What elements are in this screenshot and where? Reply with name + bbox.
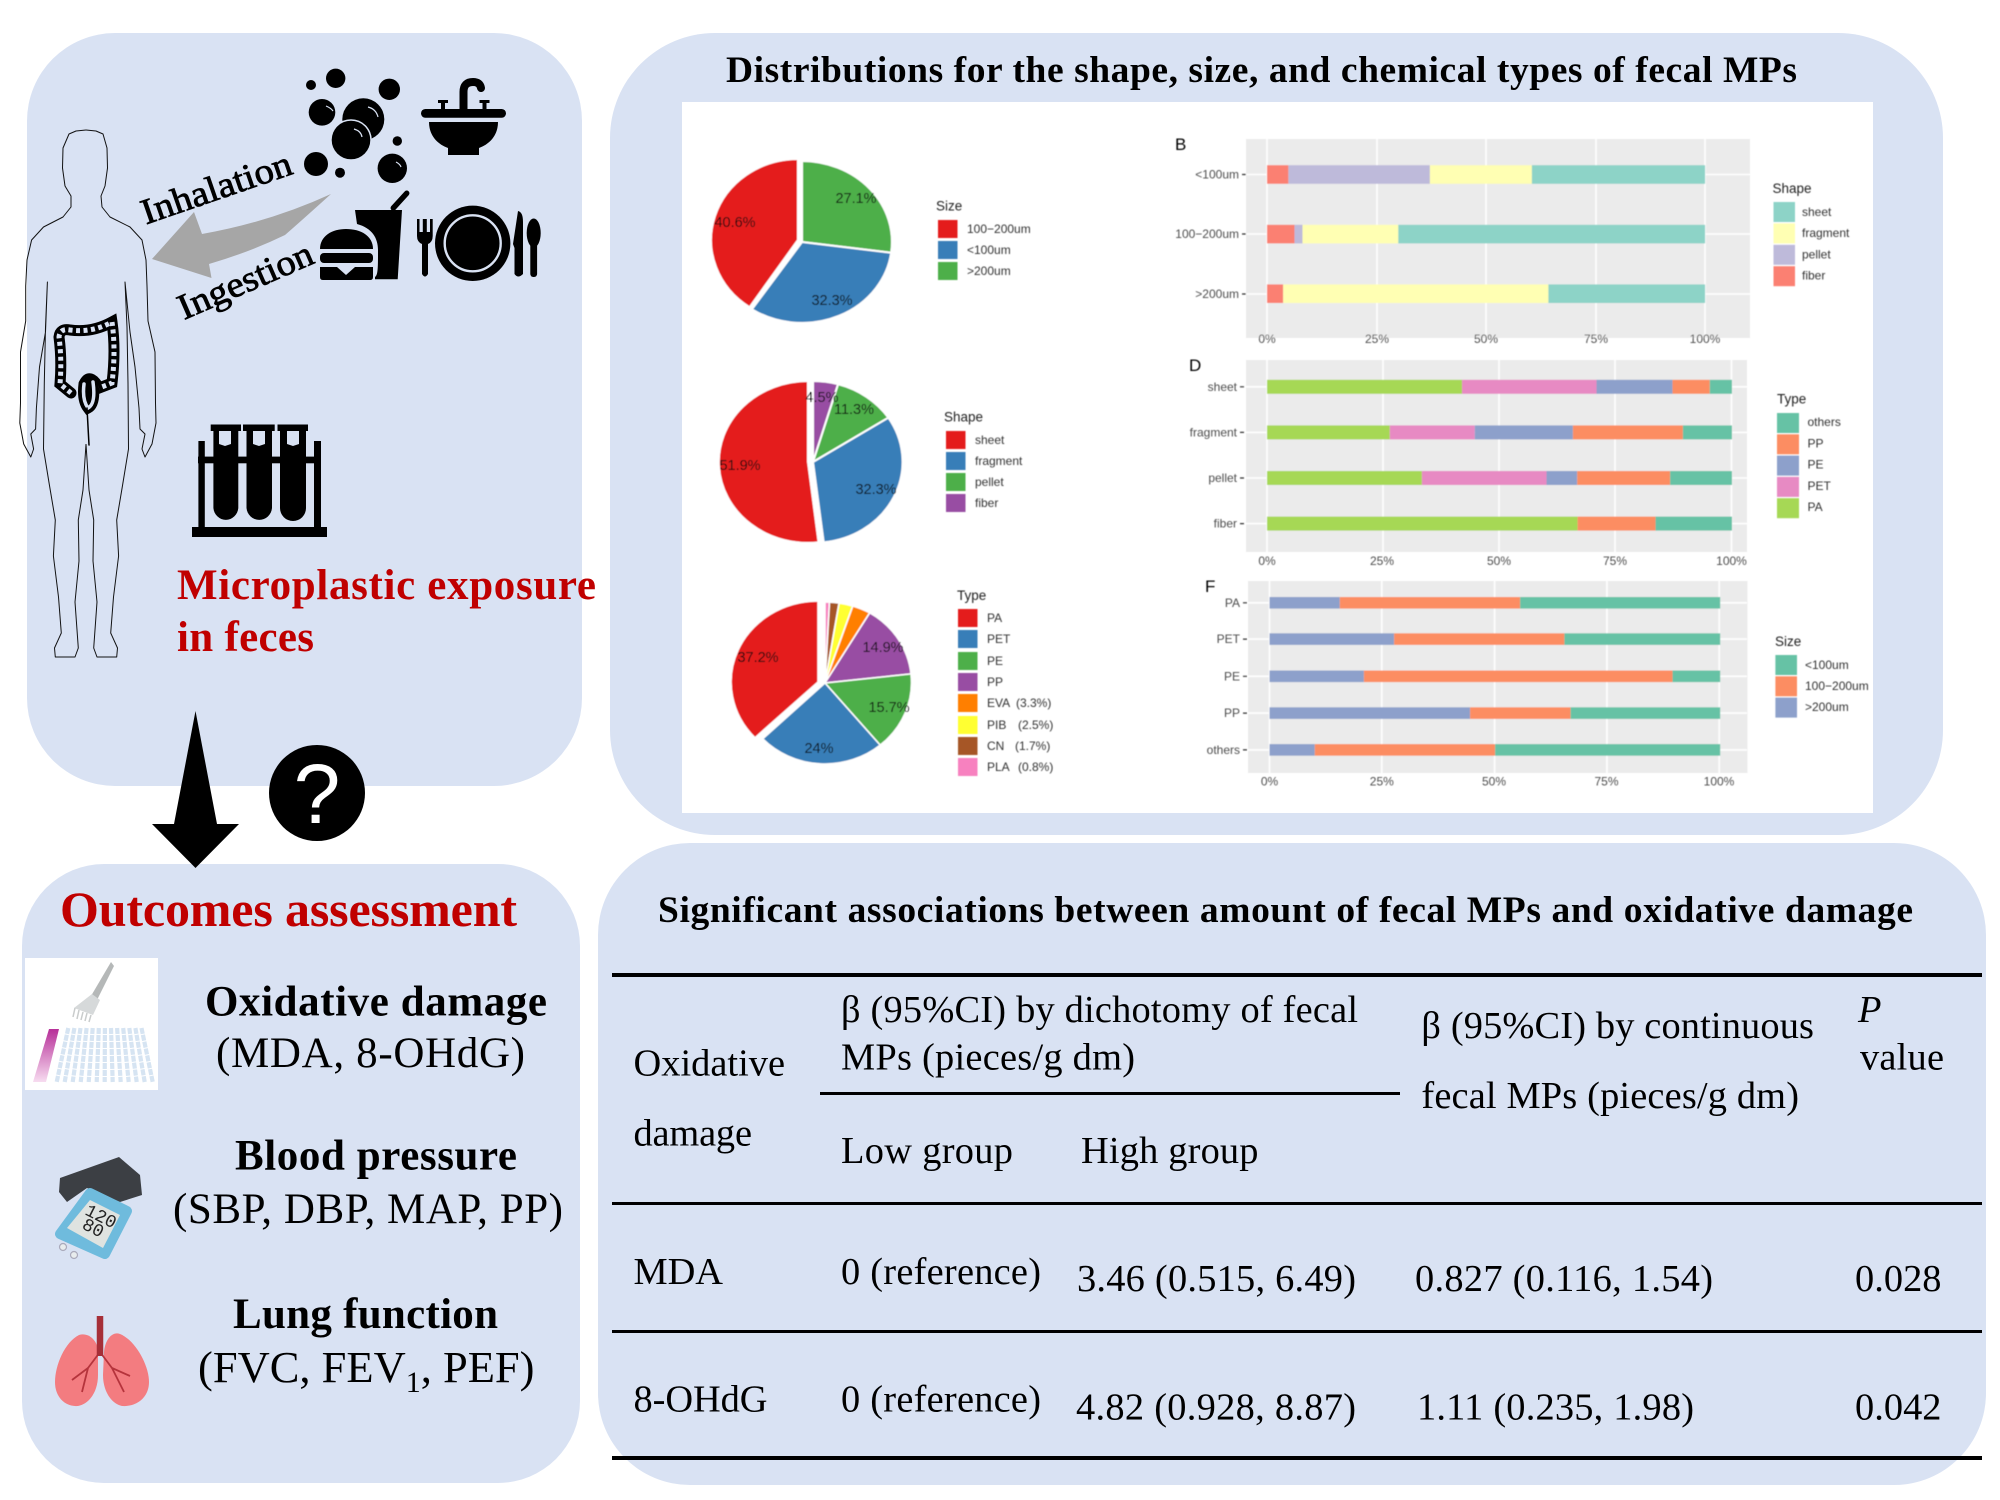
text: lung function: 1 xyxy=(406,1366,421,1399)
title: significant associations: Significant associations between amount of fecal MPs and oxidative damage xyxy=(658,890,1913,931)
legend: size: 100−200um xyxy=(967,222,1031,236)
text: lung function xyxy=(198,1291,534,1399)
legend: shape for chart B: fiber xyxy=(1802,268,1825,282)
table header xyxy=(634,989,1944,1172)
text: blood pressure: (SBP, DBP, MAP, PP) xyxy=(173,1186,563,1233)
label: ingestion: Ingestion xyxy=(171,233,319,327)
icon: question mark: ? xyxy=(294,747,340,841)
legend: size: Size xyxy=(936,198,962,214)
bar chart B: shape by size: <100um xyxy=(1195,168,1239,182)
legend: shape: pellet xyxy=(975,475,1004,489)
bar chart F: size by type: PET xyxy=(1217,632,1241,646)
pie chart: chemical type xyxy=(731,601,911,764)
table row: 8-OHdG: 1.11 (0.235, 1.98) xyxy=(1417,1386,1694,1428)
icon: sink xyxy=(421,82,506,155)
legend: shape xyxy=(944,410,1023,512)
pie chart: shape: 11.3% xyxy=(834,402,874,418)
arrow: exposure route xyxy=(152,194,331,278)
icon: blood pressure monitor xyxy=(59,1157,142,1258)
table row: MDA xyxy=(634,1251,1942,1300)
legend: size for chart F: >200um xyxy=(1805,700,1849,714)
legend: chemical type: EVA xyxy=(987,696,1010,710)
legend: chemical type: PIB xyxy=(987,718,1006,732)
table row: 8-OHdG: 0.042 xyxy=(1855,1386,1942,1428)
legend: chemical type: PP xyxy=(987,675,1003,689)
legend: shape: fiber xyxy=(975,496,998,510)
table row: MDA: 0.028 xyxy=(1855,1258,1942,1300)
bar chart B: shape by size: B xyxy=(1175,135,1186,154)
pie chart: chemical type: 37.2% xyxy=(737,650,779,666)
legend: type for chart D xyxy=(1777,392,1841,518)
table row: 8-OHdG: 0 (reference) xyxy=(841,1379,1041,1421)
legend: type for chart D: PET xyxy=(1808,479,1832,493)
table header: value xyxy=(1860,1037,1944,1079)
heading: microplastic exposure in feces: Microplastic exposure xyxy=(177,562,596,609)
pie chart: size: 32.3% xyxy=(811,293,853,309)
pie chart: shape: 51.9% xyxy=(719,458,761,474)
legend: shape: fragment xyxy=(975,454,1023,468)
table row: MDA: 0.827 (0.116, 1.54) xyxy=(1415,1258,1713,1300)
text: lung function: (FVC, FEV xyxy=(198,1342,406,1392)
bar chart D: type by shape: 25% xyxy=(1370,554,1394,568)
legend: chemical type: (1.7%) xyxy=(1015,739,1050,753)
text: oxidative damage xyxy=(205,978,547,1077)
table row: MDA: 0 (reference) xyxy=(841,1251,1041,1293)
bar chart F: size by type: PP xyxy=(1224,706,1240,720)
text: blood pressure xyxy=(173,1132,563,1233)
legend: type for chart D: PP xyxy=(1808,436,1824,450)
arrow: exposure to outcomes xyxy=(152,711,239,868)
pie chart: shape: 32.3% xyxy=(855,482,897,498)
pie chart: size xyxy=(711,159,892,323)
bar chart B: shape by size: >200um xyxy=(1195,287,1239,301)
bar chart F: size by type: 50% xyxy=(1482,774,1506,788)
table rules xyxy=(612,973,1982,1460)
icon: bubbles xyxy=(304,69,407,183)
table header: MPs (pieces/g dm) xyxy=(841,1037,1135,1079)
bar chart D: type by shape xyxy=(1189,356,1747,568)
icon: plate and cutlery xyxy=(417,206,541,281)
bar chart B: shape by size: 75% xyxy=(1584,332,1608,346)
table row: 8-OHdG xyxy=(634,1379,1942,1428)
legend: shape: Shape xyxy=(944,410,983,424)
legend: chemical type: (2.5%) xyxy=(1018,718,1053,732)
bar chart B: shape by size: 0% xyxy=(1258,332,1276,346)
bar chart F: size by type: 100% xyxy=(1704,774,1735,788)
icon: question mark xyxy=(269,745,365,841)
bar chart F: size by type: PA xyxy=(1225,596,1240,610)
legend: size: <100um xyxy=(967,243,1011,257)
legend: chemical type: Type xyxy=(957,588,986,603)
pie chart: chemical type: 15.7% xyxy=(868,700,910,716)
bar chart F: size by type: 75% xyxy=(1594,774,1619,788)
bar chart D: type by shape: pellet xyxy=(1208,471,1238,485)
pie chart: shape xyxy=(719,381,903,543)
figure background xyxy=(682,102,1873,813)
text: oxidative damage: Oxidative damage xyxy=(205,978,547,1026)
legend: chemical type: PET xyxy=(987,632,1011,646)
legend: size xyxy=(936,198,1031,280)
legend: chemical type: PE xyxy=(987,654,1003,668)
label: inhalation: Inhalation xyxy=(136,143,297,232)
bar chart B: shape by size: 50% xyxy=(1474,332,1498,346)
panel: outcomes assessment xyxy=(22,864,580,1483)
bar chart B: shape by size: 100−200um xyxy=(1175,227,1239,241)
table header: High group xyxy=(1081,1130,1258,1172)
legend: size for chart F: Size xyxy=(1775,634,1801,649)
table header: Oxidative xyxy=(634,1042,785,1084)
legend: size for chart F xyxy=(1775,634,1869,718)
legend: shape for chart B: fragment xyxy=(1802,226,1850,240)
table row: 8-OHdG: 8-OHdG xyxy=(634,1379,768,1421)
bar chart F: size by type: others xyxy=(1207,743,1240,757)
table row: 8-OHdG: 4.82 (0.928, 8.87) xyxy=(1076,1386,1356,1428)
bar chart B: shape by size xyxy=(1175,135,1750,346)
icon: pipette and microplate xyxy=(25,958,158,1090)
legend: type for chart D: others xyxy=(1808,415,1841,429)
title: distributions: Distributions for the shape, size, and chemical types of fecal MPs xyxy=(726,50,1797,91)
bar chart D: type by shape: fragment xyxy=(1190,425,1238,439)
bar chart F: size by type: PE xyxy=(1224,669,1240,683)
bar chart F: size by type: 25% xyxy=(1370,774,1394,788)
heading: outcomes assessment: Outcomes assessment xyxy=(60,881,517,937)
legend: type for chart D: Type xyxy=(1777,392,1806,406)
text: lung function: , PEF) xyxy=(421,1342,534,1392)
table header: β (95%CI) by dichotomy of fecal xyxy=(841,989,1358,1031)
legend: shape for chart B: Shape xyxy=(1772,181,1812,196)
table row: MDA: 3.46 (0.515, 6.49) xyxy=(1077,1258,1356,1300)
legend: size for chart F: <100um xyxy=(1805,658,1849,672)
heading: microplastic exposure in feces xyxy=(177,562,596,661)
legend: shape for chart B xyxy=(1772,181,1850,286)
legend: size for chart F: 100−200um xyxy=(1805,679,1869,693)
table header: β (95%CI) by continuous xyxy=(1421,1005,1814,1047)
bar chart D: type by shape: sheet xyxy=(1208,380,1238,394)
bar chart D: type by shape: fiber xyxy=(1214,517,1237,531)
legend: type for chart D: PE xyxy=(1808,458,1824,472)
bar chart B: shape by size: 100% xyxy=(1690,332,1721,346)
pie chart: shape: 4.5% xyxy=(805,390,839,406)
panel: microplastic exposure xyxy=(20,33,596,786)
legend: chemical type xyxy=(957,588,1053,776)
panel: association table xyxy=(598,843,1986,1485)
icon: test tube rack xyxy=(192,424,327,537)
legend: type for chart D: PA xyxy=(1808,500,1823,514)
bar chart F: size by type xyxy=(1205,577,1748,788)
table row: MDA: MDA xyxy=(634,1251,723,1293)
icon: burger and drink xyxy=(320,193,407,280)
bar chart F: size by type: 0% xyxy=(1261,774,1279,788)
icon: blood pressure monitor: 80 xyxy=(78,1216,107,1243)
table header: P xyxy=(1857,989,1881,1031)
heading: microplastic exposure in feces: in feces xyxy=(177,614,314,661)
icon: lungs xyxy=(55,1316,149,1406)
bar chart F: size by type: F xyxy=(1205,577,1215,596)
legend: chemical type: PA xyxy=(987,611,1002,625)
pie chart: chemical type: 24% xyxy=(804,741,834,757)
legend: chemical type: CN xyxy=(987,739,1004,753)
legend: chemical type: PLA xyxy=(987,760,1010,774)
table header: damage xyxy=(634,1112,752,1154)
bar chart D: type by shape: 100% xyxy=(1716,554,1747,568)
bar chart D: type by shape: 75% xyxy=(1603,554,1627,568)
legend: size: >200um xyxy=(967,264,1011,278)
legend: shape for chart B: pellet xyxy=(1802,248,1831,262)
pie chart: size: 27.1% xyxy=(835,191,877,207)
table header: fecal MPs (pieces/g dm) xyxy=(1421,1075,1799,1117)
legend: shape for chart B: sheet xyxy=(1802,205,1832,219)
table header: Low group xyxy=(841,1130,1013,1172)
bar chart D: type by shape: 0% xyxy=(1258,554,1276,568)
pie chart: size: 40.6% xyxy=(714,215,756,231)
legend: shape: sheet xyxy=(975,433,1005,447)
text: lung function: Lung function xyxy=(233,1291,498,1338)
bar chart B: shape by size: 25% xyxy=(1365,332,1389,346)
text: blood pressure: Blood pressure xyxy=(235,1132,517,1180)
icon: human body outline xyxy=(20,130,156,657)
text: oxidative damage: (MDA, 8-OHdG) xyxy=(216,1030,525,1077)
panel: distributions of fecal MPs xyxy=(610,33,1943,835)
pie chart: chemical type: 14.9% xyxy=(862,640,904,656)
icon: colon xyxy=(59,322,114,445)
legend: chemical type: (3.3%) xyxy=(1016,696,1051,710)
icon: blood pressure monitor: 120 xyxy=(81,1202,119,1234)
bar chart D: type by shape: D xyxy=(1189,356,1201,375)
legend: chemical type: (0.8%) xyxy=(1018,760,1053,774)
bar chart D: type by shape: 50% xyxy=(1487,554,1511,568)
